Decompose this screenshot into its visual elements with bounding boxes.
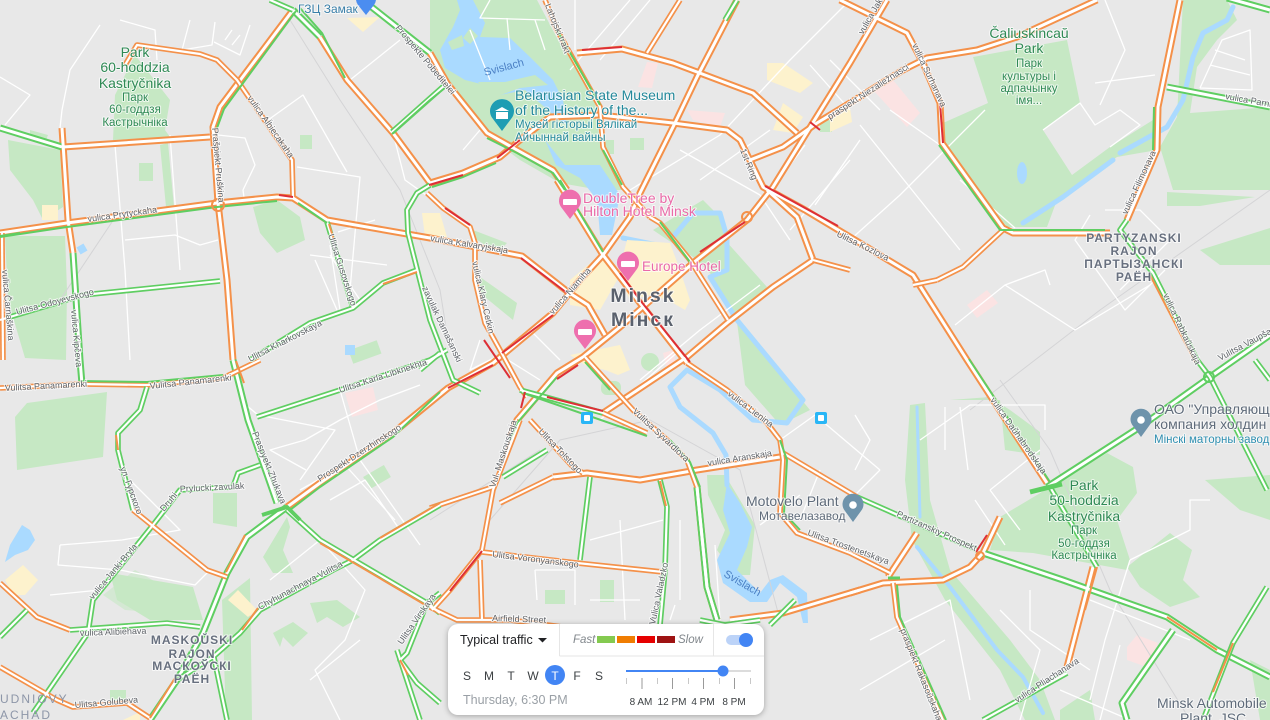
label: Caliuskincau Park: Парк — [1016, 58, 1043, 70]
road name labels: Ulitsa Golubeva — [74, 694, 138, 710]
day of week selector: T — [551, 669, 559, 683]
river channels — [623, 7, 1233, 713]
road name labels: Partizanskiy Prospekt — [895, 509, 979, 553]
time axis labels — [630, 697, 746, 708]
label: OAO managing company: ОАО "Управляющ — [1154, 401, 1270, 417]
icon: hotel pin south — [574, 320, 596, 349]
label: Partyzanski Rajon: ПАРТЫЗАНСКІ — [1084, 257, 1184, 271]
mixed direction lines: orange side — [116, 224, 1233, 718]
road junction rings and hubs — [212, 199, 1214, 578]
road name labels: ул. Гурского — [118, 465, 145, 516]
icon: grey pin Motovelo — [843, 494, 864, 522]
road name labels: vulica Kipčeva — [69, 309, 84, 367]
day of week selector: F — [573, 669, 581, 683]
road name labels: vulica Prytyckaha — [87, 204, 158, 224]
road name labels: vulica Lienina — [726, 389, 775, 429]
label: Park 50-hoddzia Kastrycnika — [1048, 477, 1120, 562]
label: Park 60-hoddzia Kastrycnika: Кастрычніка — [102, 117, 168, 129]
label: district at bottom left edge: UDNIOVY — [0, 692, 69, 706]
road name labels: Vulica Valadzko — [647, 562, 670, 625]
road name labels: Vulitsa Syvardlova — [631, 406, 691, 464]
icon: hotel pin DoubleTree — [559, 190, 581, 219]
road name labels: Prospekt Dzerzhinskogo — [316, 422, 403, 484]
label: Motovelo Plant: Motovelo Plant — [746, 493, 839, 509]
legend: fast to slow: Slow — [678, 634, 704, 646]
label: Caliuskincau Park: адпачынку — [1000, 83, 1058, 95]
icon: museum pin — [490, 99, 514, 131]
road name labels: Ulitsa Voronyanskogo — [492, 549, 579, 570]
label: Park 60-hoddzia Kastrycnika: Park — [121, 44, 150, 60]
time axis labels: 4 PM — [691, 697, 715, 708]
road name labels: vulica Pliachanava — [1013, 656, 1081, 705]
label: Minsk Automobile Plant: Minsk Automobile — [1157, 695, 1267, 711]
road name labels: vulica Niamiha — [547, 266, 593, 316]
label: Park 50-hoddzia Kastrycnika: 50-годдзя — [1058, 538, 1110, 550]
time axis labels: 12 PM — [658, 697, 686, 708]
label: Park 60-hoddzia Kastrycnika: Kastryčnika — [99, 75, 171, 91]
road name labels: Vulitsa Panamarenki — [149, 372, 232, 391]
label: Caliuskincau Park: Čaliuskincaŭ — [989, 25, 1069, 41]
label: Maskouski Rajon — [151, 632, 233, 686]
road name labels: Ulitsa Kozlova — [835, 229, 891, 263]
toggle switch — [726, 633, 753, 647]
label: DoubleTree by Hilton Hotel Minsk: Hilton Hotel Minsk — [583, 203, 697, 219]
label: Maskouski Rajon: RAJON — [168, 647, 216, 661]
road name labels: Druhi — [158, 490, 179, 513]
label: Park 50-hoddzia Kastrycnika: 50-hoddzia — [1049, 492, 1119, 508]
islands in the river — [448, 28, 548, 97]
label: OAO managing company: компания холдин — [1154, 416, 1266, 432]
label: DoubleTree by Hilton Hotel Minsk — [583, 190, 697, 219]
road name labels: Ulitsa Kharkovskaya — [246, 318, 324, 364]
label: DoubleTree by Hilton Hotel Minsk: DoubleTree by — [583, 190, 674, 206]
road name labels: vulica Janki Bryla — [87, 542, 139, 601]
road name labels: vulica Daŭhabrodskaja — [988, 395, 1049, 476]
label: Maskouski Rajon: РАЁН — [174, 671, 210, 686]
label: city name Minsk — [610, 285, 676, 331]
road name labels: Ulitsa Gusovskogo — [326, 233, 359, 307]
label: Svislach river north: Svislach — [483, 57, 525, 79]
road name labels: Ulitsa Virskaya — [395, 592, 438, 646]
label: Maskouski Rajon: МАСКОЎСКІ — [152, 658, 232, 673]
traffic control panel — [448, 624, 764, 715]
label: Park 50-hoddzia Kastrycnika: Парк — [1071, 525, 1098, 537]
label: Caliuskincau Park: імя... — [1016, 95, 1042, 107]
day of week selector: S — [595, 669, 603, 683]
label: Belarusian State Museum: Айчыннай вайны — [515, 132, 605, 144]
road name labels: Airfield Street — [492, 613, 547, 625]
label: Park 50-hoddzia Kastrycnika: Кастрычніка — [1051, 550, 1117, 562]
road name labels: vulica Rabkaŭskaja — [1161, 292, 1203, 366]
day of week selector: S — [463, 669, 471, 683]
label: Park 60-hoddzia Kastrycnika: 60-годдзя — [109, 104, 161, 116]
label: Caliuskincau Park: культуры і — [1002, 71, 1056, 83]
label: Motovelo Plant — [746, 493, 845, 523]
label: OAO managing company — [1154, 401, 1270, 446]
day of week selector: W — [527, 669, 539, 683]
road name labels: 1st Ring — [738, 147, 760, 181]
label: Partyzanski Rajon: PARTYZANSKI — [1086, 231, 1182, 245]
label: Europe Hotel: Europe Hotel — [642, 259, 721, 274]
label: Svislach river south: Svislach — [722, 568, 763, 599]
road name labels: Vul. Maskouskaja — [487, 419, 519, 489]
dropdown: typical traffic: Typical traffic — [460, 633, 533, 647]
label: Maskouski Rajon: MASKOŬSKI — [151, 632, 233, 647]
road name labels: praspiekt Rakasoŭskaha — [898, 627, 944, 720]
road name labels: Prašpiekt Pruškina — [210, 127, 227, 203]
icon: metro station east — [815, 412, 827, 424]
road name labels: vulica Aĺbiecakaha — [245, 93, 297, 160]
road name labels: vulica Alibiehava — [80, 626, 147, 638]
label: Park 50-hoddzia Kastrycnika: Park — [1070, 477, 1099, 493]
road name labels: Vulitsa Panamarenki — [5, 379, 87, 393]
label: Belarusian State Museum: Музей гісторыі Вялікай — [515, 119, 637, 131]
legend: fast to slow: Fast — [573, 634, 596, 646]
label: city name Minsk: Мінск — [611, 309, 675, 331]
pink institutional blocks — [345, 62, 1158, 667]
road name labels: vulica Filimonava — [1120, 149, 1158, 216]
road name labels: zavulak Damašanski — [420, 285, 464, 364]
panel card — [448, 624, 764, 715]
road name labels: vulica Klary Cetkin — [470, 260, 496, 335]
label: Minsk Automobile Plant — [1157, 695, 1267, 720]
legend: fast to slow — [573, 634, 704, 646]
road name labels: Praspyekt Zhukava — [250, 430, 288, 505]
label: Park 60-hoddzia Kastrycnika: 60-hoddzia — [100, 59, 170, 75]
time slider — [626, 666, 751, 689]
label: Partyzanski Rajon: РАЁН — [1116, 269, 1152, 284]
label: Park 50-hoddzia Kastrycnika: Kastryčnika — [1048, 508, 1120, 524]
road name labels: Ulitsa Karla Libknekhta — [338, 357, 428, 395]
road name labels: Ulitsa Tolstogo — [537, 426, 584, 475]
day of week selector: M — [484, 669, 494, 683]
label: district at bottom left edge — [0, 692, 69, 720]
day of week selector — [463, 665, 603, 685]
road name labels: vulica Čarnaškina — [0, 269, 16, 341]
road name labels: Prospekte Pobeditelei — [393, 23, 457, 96]
label: city name Minsk: Minsk — [610, 285, 676, 307]
slow traffic segments in red — [279, 47, 987, 591]
label: Park 60-hoddzia Kastrycnika: Парк — [122, 92, 149, 104]
label: Caliuskincau Park: Park — [1015, 40, 1044, 56]
label: Motovelo Plant: Мотавелазавод — [759, 509, 845, 523]
water: river Svislach and ponds — [5, 0, 1027, 623]
road name labels: vulica Kalvaryjskaja — [430, 233, 509, 255]
label: Partyzanski Rajon — [1084, 231, 1184, 284]
icon: hotel pin Europe — [617, 252, 639, 281]
time axis labels: 8 PM — [722, 697, 746, 708]
label: Belarusian State Museum: of the History of the... — [515, 102, 648, 118]
label: Caliuskincau Park — [989, 25, 1069, 107]
road name labels: Ulitsa Odoyevskogo — [15, 287, 95, 317]
icon: blue shopping pin top — [356, 0, 376, 15]
road name labels: Lahojski trakt — [543, 2, 572, 55]
road name labels: vulica Aranskaja — [707, 448, 773, 468]
label: GZC Zamak: ГЗЦ Замак — [298, 2, 359, 16]
day of week selector: T — [507, 669, 515, 683]
city centre and built-up yellow blocks — [5, 17, 852, 720]
road name labels: Ulitsa Trostenetskaya — [806, 527, 891, 566]
road name labels: Chyhunachnaya Vulitsa — [256, 559, 344, 612]
label: Belarusian State Museum: Belarusian State Museum — [515, 87, 675, 103]
road name labels: vulica Surhanava — [910, 42, 948, 108]
label: Park 60-hoddzia Kastrycnika — [99, 44, 171, 129]
time axis labels: 8 AM — [630, 697, 652, 708]
icon: grey pin motor plant — [1131, 409, 1152, 437]
road name labels: Prylucki zavulak — [180, 481, 245, 494]
label: Partyzanski Rajon: RAJON — [1110, 244, 1158, 258]
selected time: Thursday, 6:30 PM — [463, 693, 568, 707]
label: Belarusian State Museum — [515, 87, 675, 144]
road name labels: praspekt Niezaliežnasci — [826, 62, 910, 122]
label: OAO managing company: Мінскі маторны завод — [1154, 434, 1270, 446]
icon: metro station west — [581, 412, 593, 424]
